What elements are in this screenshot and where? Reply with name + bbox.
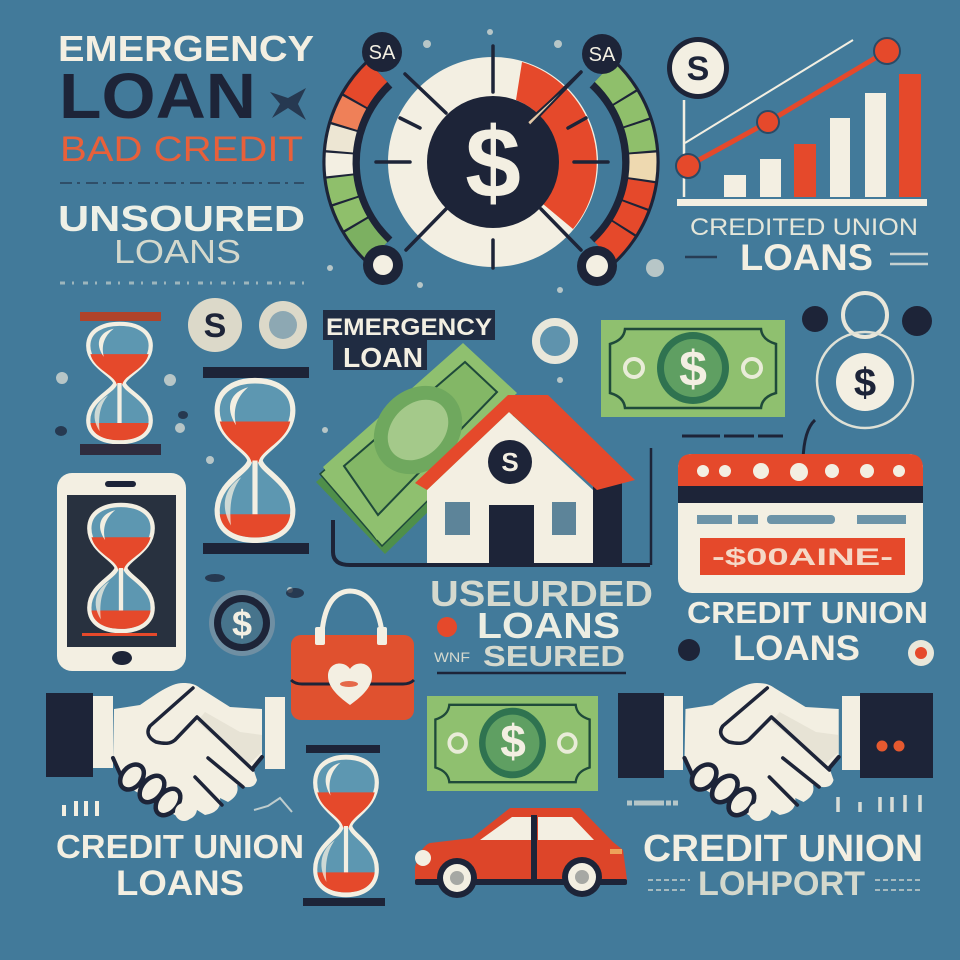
phone: [57, 473, 186, 671]
money stack: [316, 343, 530, 554]
title block: [58, 28, 314, 283]
handbag: [291, 591, 414, 720]
banknote bottom: [427, 696, 598, 791]
bow mark: [270, 88, 306, 120]
right SA label: SA: [589, 44, 616, 66]
heading: unsoured: UNSOURED: [58, 198, 305, 239]
windows: [445, 502, 576, 535]
chart baseline: [677, 199, 927, 206]
bottom left label: [56, 828, 304, 903]
door line: [531, 815, 537, 879]
left scale foot: [363, 245, 403, 285]
left tick marks: [64, 801, 97, 816]
ground line: [333, 520, 650, 565]
right dark cuff: [860, 693, 933, 778]
left scale head: [362, 32, 402, 72]
heading: loan: LOAN: [59, 60, 256, 132]
hourglass one: [80, 312, 161, 455]
key ring coin: [802, 293, 932, 428]
under strip: [415, 879, 627, 885]
hourglass four: [303, 745, 385, 906]
top cap: [306, 745, 380, 753]
banknote top right: [601, 320, 785, 417]
bag handle: [322, 591, 382, 632]
house coin: [488, 440, 532, 484]
clock ring: [536, 322, 574, 360]
right white cuff: [842, 696, 860, 770]
label: lohport: LOHPORT: [698, 865, 865, 903]
note medallion: [356, 368, 480, 492]
note border: [344, 362, 497, 515]
underline: [437, 672, 626, 674]
gauge needle: [527, 72, 582, 126]
divider: [60, 182, 304, 184]
side dots: [678, 639, 934, 666]
heading: bad credit: BAD CREDIT: [60, 130, 303, 169]
bottom cap: [303, 898, 385, 906]
gauge red sector: [516, 62, 597, 229]
bag flap: [291, 680, 414, 684]
coin pair: [188, 298, 307, 352]
scattered specks: [56, 29, 664, 593]
label: credit union: CREDIT UNION: [56, 828, 304, 865]
right credit union label: [678, 595, 934, 668]
walls: [427, 412, 593, 563]
left foot knob: [373, 255, 393, 275]
coin one: S: [204, 307, 226, 345]
car windows: [480, 817, 594, 840]
bag heart: [328, 664, 372, 705]
bottom cap: [203, 543, 309, 554]
hourglass two: [203, 367, 309, 554]
gauge hub: [427, 96, 559, 228]
bill dollar: $: [500, 715, 526, 767]
right scale: [577, 34, 643, 286]
left scale: [339, 32, 403, 285]
card dark band: [678, 486, 923, 503]
right scale segments: [604, 72, 643, 252]
side wall: [593, 478, 622, 563]
center text block: [430, 573, 653, 673]
top cap: [203, 367, 309, 378]
growth chart: [667, 37, 928, 278]
car wheels: [437, 857, 602, 898]
phone speaker: [105, 481, 136, 487]
phone red strip: [82, 633, 157, 636]
chart bars: [724, 74, 921, 197]
caption marks: [648, 880, 922, 890]
right handshake: [618, 683, 933, 821]
top note: [323, 343, 517, 540]
car: [415, 808, 627, 898]
glass: [88, 324, 151, 442]
hands: [113, 683, 262, 821]
chart caption marks: [890, 254, 928, 264]
label: useurded: USEURDED: [430, 573, 653, 614]
left white cuff: [664, 696, 683, 770]
phone home button: [112, 651, 132, 665]
chart coin: S: [687, 50, 709, 88]
left SA label: SA: [369, 42, 396, 64]
side dots: [802, 306, 932, 336]
bag tabs: [315, 627, 387, 645]
phone screen: [67, 495, 176, 647]
card body: [678, 454, 923, 593]
glass: [315, 757, 377, 895]
dollar badge: [209, 590, 275, 656]
chart label: loans: LOANS: [740, 237, 873, 278]
headlight: [415, 850, 431, 866]
heading: emergency: EMERGENCY: [58, 28, 314, 69]
taillight: [610, 849, 622, 854]
card top band: [678, 454, 923, 486]
chart axis: [683, 100, 685, 197]
right scale inner line: [592, 85, 626, 240]
house: [333, 395, 651, 565]
top cap: [80, 312, 161, 321]
card red strip: [700, 538, 905, 575]
outer ring: [817, 332, 913, 428]
left scale inner line: [356, 85, 390, 240]
hands: [684, 683, 839, 821]
dashed note line: [682, 434, 783, 438]
heart mark: [340, 681, 358, 687]
label plate: [323, 310, 495, 370]
chart trend line: [688, 51, 887, 166]
heading: loans: LOANS: [114, 233, 241, 270]
phone body: [57, 473, 186, 671]
coin two: [259, 301, 307, 349]
dollar badge: $: [232, 603, 252, 644]
chart label: credited union: CREDITED UNION: [690, 214, 918, 241]
phone hourglass: [89, 505, 153, 631]
chart left marks: [685, 256, 717, 258]
pin: [803, 420, 815, 460]
lower notes: [316, 355, 530, 554]
left scale segments: [339, 72, 378, 252]
label: seured: SEURED: [483, 641, 625, 673]
bottom right label: [643, 828, 923, 903]
gauge dollar: $: [465, 107, 521, 219]
label: loans: LOANS: [477, 605, 620, 646]
gauge ticks: [376, 46, 608, 268]
credit card: [678, 420, 923, 593]
house dollar: S: [501, 447, 519, 477]
label: emergency: EMERGENCY: [326, 314, 492, 341]
bottom cap: [80, 444, 161, 455]
right scale head: [582, 34, 622, 74]
chart coin: [667, 37, 729, 99]
card lines: [697, 515, 906, 524]
cuff dots: [876, 740, 904, 752]
scattered dark blobs: [55, 411, 304, 598]
right wrist mark: [254, 798, 292, 812]
bill dollar: $: [679, 341, 707, 397]
card strip text: -$00AINE-: [712, 544, 893, 571]
chart points: [676, 38, 900, 178]
red mark: [437, 617, 457, 637]
left white cuff: [93, 696, 113, 768]
label: loans: LOANS: [116, 864, 244, 903]
card dots: [697, 463, 905, 481]
caption scribble: [60, 282, 304, 284]
label: credit union: CREDIT UNION: [687, 595, 928, 630]
top ring: [843, 293, 887, 337]
coin: [836, 353, 894, 411]
coin dollar: $: [854, 361, 876, 405]
roof: [415, 395, 635, 490]
side post: [650, 448, 652, 565]
gauge dial: [388, 57, 598, 267]
label: wnf: WNF: [434, 649, 470, 665]
right foot knob: [586, 255, 608, 277]
door: [489, 505, 534, 563]
glass: [217, 381, 293, 540]
car body: [415, 808, 627, 884]
gauge: [339, 32, 643, 286]
right white cuff: [265, 697, 285, 769]
right scale foot: [577, 246, 617, 286]
label: loan: LOAN: [343, 342, 423, 373]
dark cuff: [46, 693, 93, 777]
left dark cuff: [618, 693, 664, 778]
right tick marks: [838, 795, 920, 812]
chart thin trend: [685, 40, 853, 143]
right scale track: [604, 72, 643, 252]
label: loans: LOANS: [733, 629, 860, 668]
bag body: [291, 635, 414, 720]
label: credit union: CREDIT UNION: [643, 828, 923, 870]
right side marks: [627, 800, 678, 806]
left handshake: [46, 683, 285, 821]
left scale track: [339, 72, 378, 252]
emergency loan label: [323, 310, 495, 373]
